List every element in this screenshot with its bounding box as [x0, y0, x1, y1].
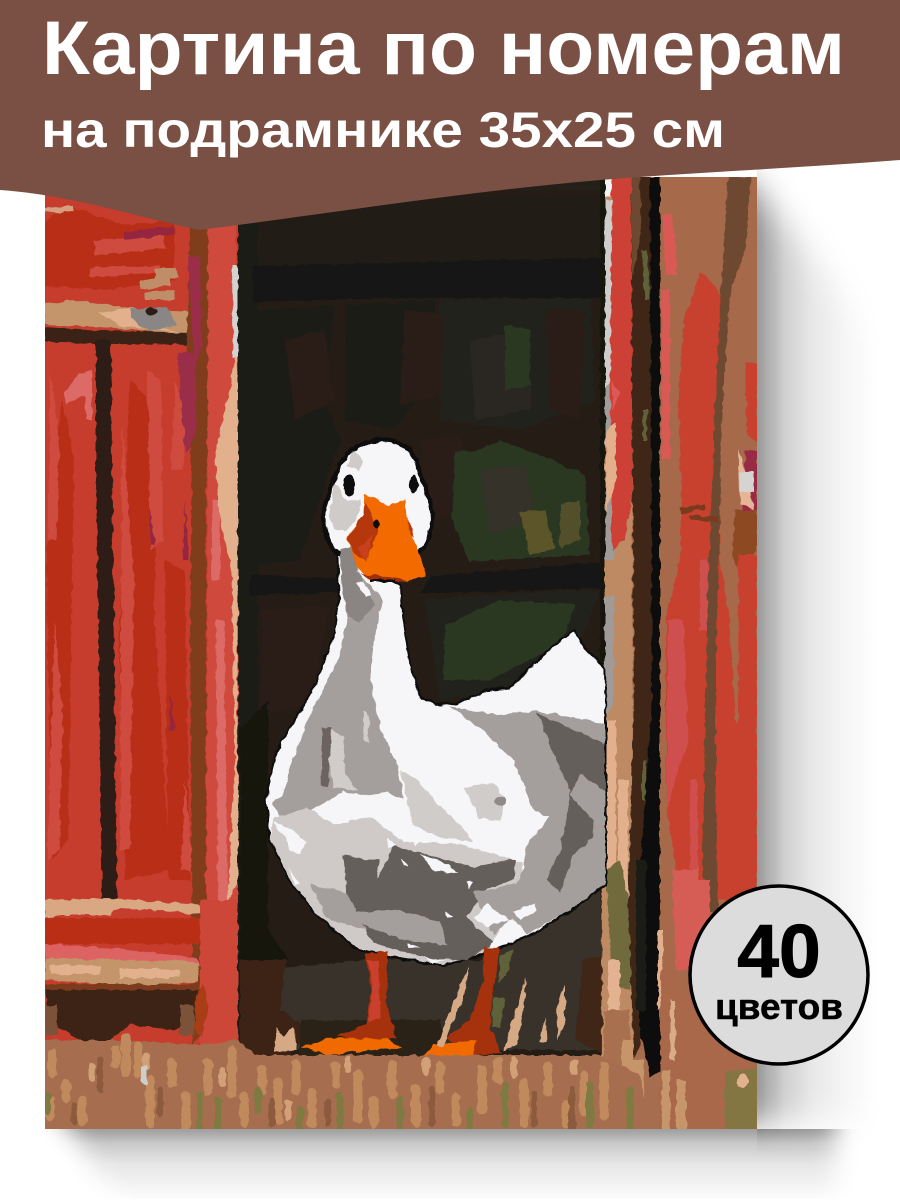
- right pale red strip and beige edge: [204, 226, 238, 900]
- title: Картина по номерам: [42, 6, 845, 91]
- badge number: 40: [737, 909, 821, 993]
- panel: right door frame: [600, 170, 757, 1137]
- painting of a white goose in a red barn door: [30, 170, 757, 1137]
- foreground grass blades: [274, 966, 566, 1052]
- white feather highlights: [273, 821, 307, 886]
- goose head: [323, 440, 432, 582]
- header banner: [0, 0, 900, 230]
- floor: [275, 882, 606, 1050]
- dark brown post: [627, 177, 654, 1060]
- lower belly: [270, 808, 523, 964]
- panel: left red barn door: [45, 204, 240, 1045]
- mid grey chest: [273, 558, 403, 816]
- subtitle: на подрамнике 35х25 см: [41, 102, 725, 158]
- upper beige rail: [45, 300, 198, 335]
- goose beak: [347, 494, 426, 582]
- lower rails: [45, 898, 205, 920]
- illustration: white goose: [267, 440, 605, 1055]
- goose body: [267, 554, 605, 964]
- panel: dark doorway interior: [238, 190, 606, 1060]
- painting underlay: [45, 177, 757, 1130]
- goose legs and feet: [302, 947, 513, 1055]
- right grey flank: [450, 706, 605, 935]
- ground with dry grass: [45, 1038, 650, 1135]
- brown post: [186, 225, 211, 1045]
- red-brown siding: [658, 194, 686, 930]
- dark crossbar and stile: [45, 327, 195, 345]
- green patches: [452, 440, 590, 562]
- badge label: цветов: [715, 986, 843, 1027]
- badge: 40 colours: [690, 886, 868, 1064]
- goose eyes: [344, 474, 418, 496]
